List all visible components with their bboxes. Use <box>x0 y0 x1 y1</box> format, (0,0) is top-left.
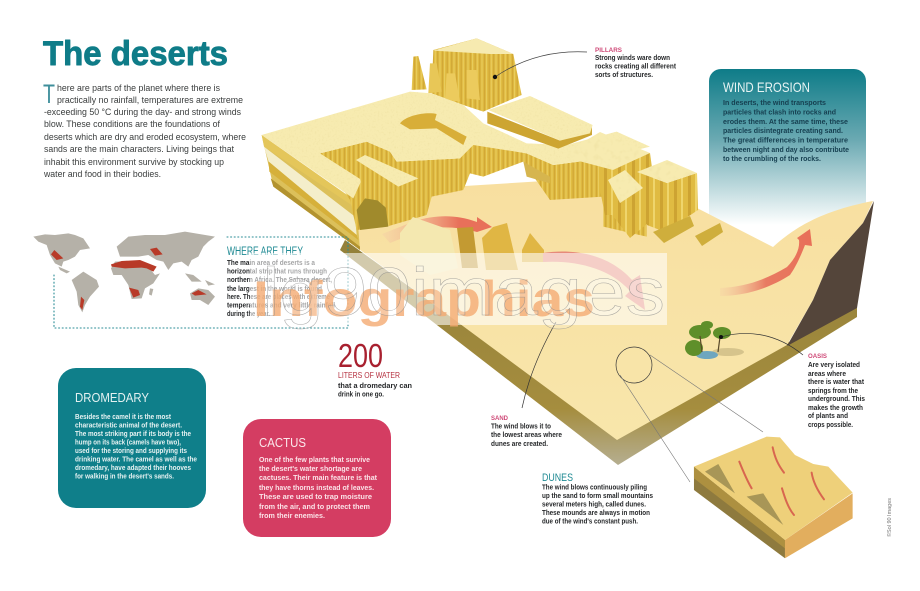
panel: wind erosion: particles disintegrate creating sand. <box>723 126 843 135</box>
label: dunes: due of the wind's constant push. <box>542 516 638 526</box>
label: sand: The wind blows it to <box>491 422 552 430</box>
label: oasis: of plants and <box>808 411 848 420</box>
label: sand: SAND <box>491 415 508 422</box>
label: dunes: several meters high, called dunes. <box>542 500 646 508</box>
intro text <box>43 79 246 179</box>
panel: wind erosion: between night and day also contribute <box>723 145 849 154</box>
upper mesa <box>487 112 592 149</box>
intro text: T <box>43 79 55 109</box>
intro text: blow. These conditions are the foundations of <box>44 119 220 129</box>
dune inset <box>694 437 853 558</box>
label: dunes <box>542 472 653 526</box>
panel: dromedary: The most striking part if its body is the <box>75 429 191 438</box>
sand floor and hill <box>340 180 873 440</box>
cliffs <box>320 142 647 237</box>
copyright: ©Sol 90 Images <box>886 498 893 537</box>
watermark: lg90images <box>262 254 665 330</box>
intro text: -exceeding 50 °C during the day- and strong winds <box>44 107 241 117</box>
label: oasis: there is water that <box>808 377 865 386</box>
stat: 200 liters <box>338 337 412 398</box>
illustration: desert block <box>262 38 874 482</box>
panel: wind erosion: to the crumbling of the rocks. <box>723 154 821 163</box>
zoom circle <box>616 347 652 383</box>
panel: wind erosion: erodes them. At the same time, these <box>723 117 848 126</box>
panel: dromedary: DROMEDARY <box>75 390 149 405</box>
label: oasis: underground. This <box>808 394 865 403</box>
title: The deserts <box>43 35 228 73</box>
intro text: here are parts of the planet where there is <box>57 83 220 93</box>
stat: 200 liters: that a dromedary can <box>338 381 412 390</box>
left strata <box>262 135 360 250</box>
sand side strip <box>340 240 857 465</box>
rock massif in zoom coordinates <box>262 38 650 250</box>
panel: dromedary <box>58 368 206 508</box>
panel: wind erosion: WIND EROSION <box>723 79 810 95</box>
label: oasis <box>808 353 865 429</box>
world map <box>33 232 215 312</box>
where are they: northern Africa. The Sahara desert, <box>227 275 332 284</box>
pit <box>400 113 467 145</box>
label: pillars: PILLARS <box>595 47 622 54</box>
label: dunes: DUNES <box>542 472 573 484</box>
label: oasis: Are very isolated <box>808 360 860 369</box>
stat: 200 liters: drink in one go. <box>338 390 384 398</box>
panel: cactus: the desert's water shortage are <box>259 464 362 473</box>
where are they: The main area of deserts is a <box>227 258 316 267</box>
stat: 200 liters: 200 <box>338 337 383 374</box>
label: sand: dunes are created. <box>491 439 548 448</box>
arrow: rising wind on hill <box>720 229 812 296</box>
panel: dromedary: drinking water. The camel as well as the <box>75 454 197 464</box>
label: dunes: up the sand to form small mountains <box>542 491 653 500</box>
panel: cactus <box>243 419 391 537</box>
panel: dromedary: for walking in the desert's sands. <box>75 472 174 480</box>
label: pillars: sorts of structures. <box>595 70 653 79</box>
pillars leader <box>493 52 587 79</box>
intro text: sands are the main characters. Living beings that <box>44 144 234 154</box>
inner strip <box>356 160 427 213</box>
stat: 200 liters: LITERS OF WATER <box>338 370 400 380</box>
panel: cactus: These are used to trap moisture <box>259 492 372 501</box>
tower <box>412 38 522 112</box>
arrow: left wind <box>382 216 492 243</box>
where are they: during the year. <box>227 309 270 318</box>
label: oasis: makes the growth <box>808 403 863 412</box>
label: oasis: areas where <box>808 369 846 378</box>
panel: cactus: from their enemies. <box>259 511 325 520</box>
where are they: the largest in the world is found <box>227 284 322 293</box>
where are they: here. These are places with extreme <box>227 292 330 301</box>
label: sand <box>491 415 562 448</box>
oasis leader <box>719 333 803 355</box>
where are they <box>227 246 335 318</box>
where are they: WHERE ARE THEY <box>227 246 303 258</box>
panel: dromedary: characteristic animal of the desert. <box>75 420 182 430</box>
panel: wind erosion: In deserts, the wind transports <box>723 98 826 107</box>
label: oasis: OASIS <box>808 353 827 360</box>
label: dunes: These mounds are always in motion <box>542 508 650 517</box>
intro text: deserts which are dry and eroded ecosystem, where <box>44 132 246 142</box>
small rocks by the arrow <box>400 217 544 275</box>
cliff shadow <box>357 198 388 230</box>
main plateau <box>262 92 650 198</box>
intro text: practically no rainfall, temperatures are extreme <box>57 95 243 105</box>
arrow: wind over sand <box>543 251 645 310</box>
dune callout lines <box>620 355 763 482</box>
intro text: inhabit this environment survive by stocking up <box>44 157 224 167</box>
oasis <box>685 321 744 359</box>
where are they: horizontal strip that runs through <box>227 266 327 276</box>
panel: dromedary: Besides the camel it is the most <box>75 412 172 421</box>
label: oasis: crops possible. <box>808 420 853 429</box>
panel: wind erosion: particles that clash into rocks and <box>723 108 836 116</box>
panel: cactus: CACTUS <box>259 435 306 450</box>
watermark: Infographias <box>253 271 595 327</box>
label: oasis: springs from the <box>808 386 858 395</box>
panel: wind erosion: The great differences in temperature <box>723 136 848 144</box>
panel: cactus: cactuses. Their main feature is that <box>259 473 378 482</box>
sand leader <box>522 322 556 408</box>
dark rock face <box>787 201 874 346</box>
panel: cactus: they have thorns instead of leaves. <box>259 483 374 492</box>
panel: dromedary: dromedary, have adapted their hooves <box>75 463 191 472</box>
label: pillars: Strong winds ware down <box>595 53 670 62</box>
right rock blocks <box>560 132 723 246</box>
where are they: temperatures and very little rainfall <box>227 300 335 310</box>
panel: cactus: One of the few plants that survive <box>259 455 370 464</box>
panel: dromedary: hump on its back (camels have two), <box>75 438 181 446</box>
panel: cactus: from the air, and to protect them <box>259 502 370 511</box>
intro text: water and food in their bodies. <box>43 169 161 179</box>
panel: wind erosion <box>709 69 866 225</box>
panel: dromedary: used for the storing and supplying its <box>75 446 187 455</box>
label: dunes: The wind blows continuously piling <box>542 482 647 492</box>
map frame <box>54 237 348 328</box>
label: pillars: rocks creating all different <box>595 62 677 70</box>
label: sand: the lowest areas where <box>491 430 562 439</box>
label: pillars <box>595 47 677 79</box>
